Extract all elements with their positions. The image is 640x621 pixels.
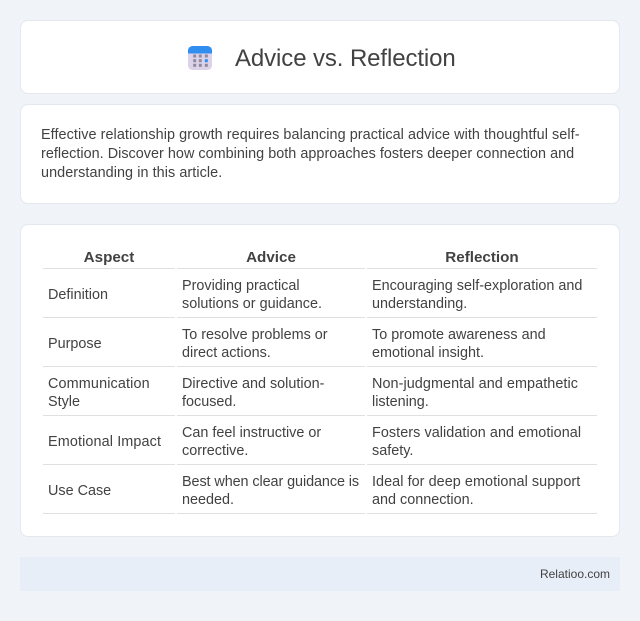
- comparison table: Definition: [48, 287, 108, 303]
- comparison table: direct actions.: [182, 345, 271, 361]
- comparison table: Use Case: [48, 483, 111, 499]
- icon: calendar: [188, 46, 212, 70]
- intro text: understanding in this article.: [41, 165, 222, 181]
- intro panel: [20, 104, 620, 204]
- comparison table: listening.: [372, 394, 429, 410]
- table panel: [20, 224, 620, 537]
- comparison table: Purpose: [48, 336, 102, 352]
- comparison table: solutions or guidance.: [182, 296, 322, 312]
- comparison table: Non-judgmental and empathetic: [372, 376, 578, 392]
- comparison table: Best when clear guidance is: [182, 474, 359, 490]
- comparison table: focused.: [182, 394, 236, 410]
- intro text: reflection. Discover how combining both approaches fosters deeper connection and: [41, 146, 574, 162]
- comparison table: Reflection: [445, 249, 519, 266]
- comparison table: Directive and solution-: [182, 376, 324, 392]
- comparison table: Advice: [246, 249, 296, 266]
- comparison table: Can feel instructive or: [182, 425, 321, 441]
- comparison table: and connection.: [372, 492, 474, 508]
- comparison table: safety.: [372, 443, 413, 459]
- intro text: Effective relationship growth requires balancing practical advice with thoughtful self-: [41, 127, 580, 143]
- intro text: [41, 127, 580, 181]
- comparison table: Communication: [48, 376, 150, 392]
- comparison table: Providing practical: [182, 278, 300, 294]
- footer text: Relatioo.com: [540, 567, 610, 581]
- comparison table: Fosters validation and emotional: [372, 425, 581, 441]
- footer bar: [20, 557, 620, 591]
- comparison table: Emotional Impact: [48, 434, 161, 450]
- comparison table: understanding.: [372, 296, 467, 312]
- comparison table: To promote awareness and: [372, 327, 546, 343]
- title: Advice vs. Reflection: [235, 45, 456, 72]
- comparison table: corrective.: [182, 443, 248, 459]
- comparison table: emotional insight.: [372, 345, 484, 361]
- header panel: [20, 20, 620, 94]
- comparison table: Style: [48, 394, 80, 410]
- comparison table: To resolve problems or: [182, 327, 328, 343]
- comparison table: Aspect: [84, 249, 134, 266]
- comparison table: Encouraging self-exploration and: [372, 278, 582, 294]
- comparison table: needed.: [182, 492, 234, 508]
- comparison table: Ideal for deep emotional support: [372, 474, 580, 490]
